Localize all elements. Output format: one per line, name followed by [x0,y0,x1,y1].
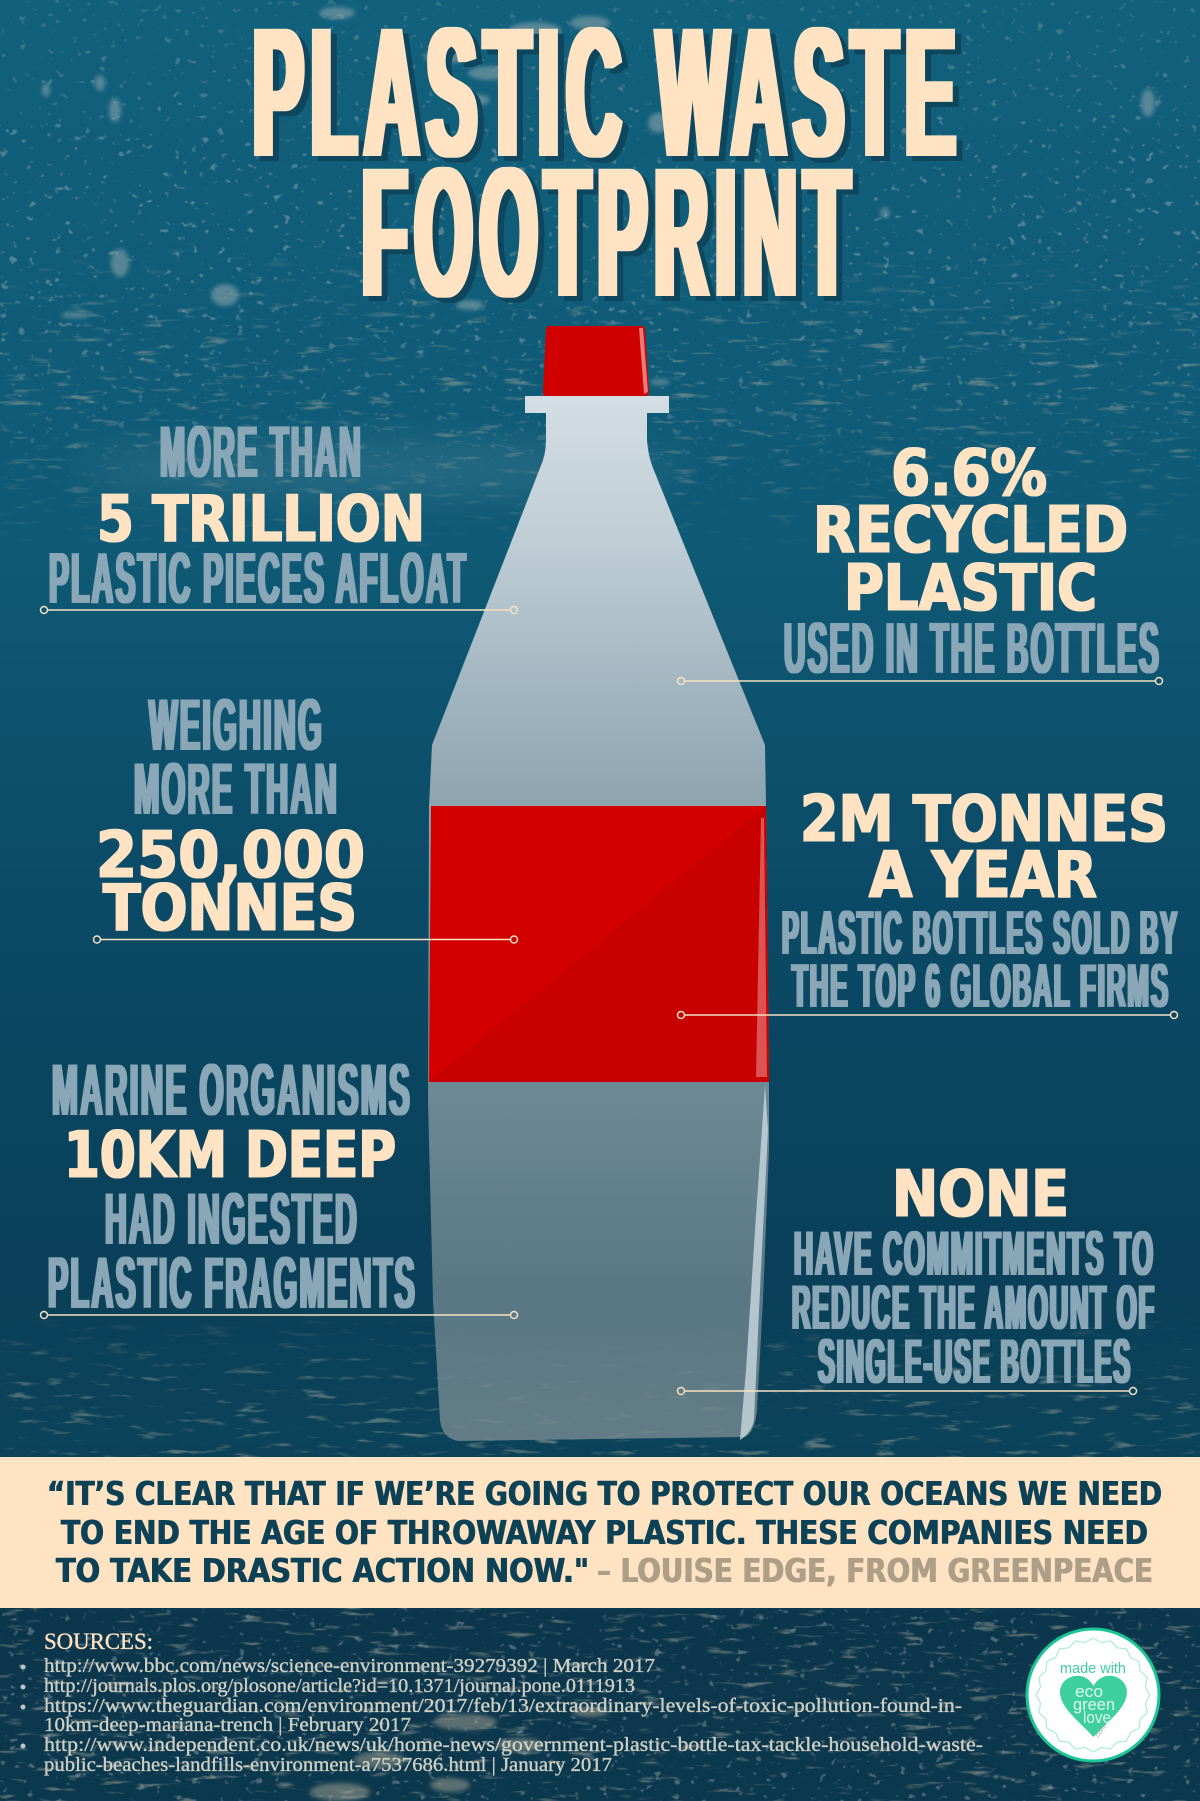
sources list: public-beaches-landfills-environment-a7537686.html | January 2017 [44,1754,612,1776]
callout: none have commitments [678,1158,1156,1397]
callout: marine organisms 10km deep: MARINE ORGANISMS [52,1050,412,1131]
bottle cap [543,326,649,396]
sources list: https://www.theguardian.com/environment/2017/feb/13/extraordinary-levels-of-toxic-pollution-found-in- [44,1695,962,1717]
callout: 6.6% recycled plastic: PLASTIC [844,552,1097,626]
bottle highlight [740,1085,768,1440]
callout: marine organisms 10km deep: HAD INGESTED [105,1179,359,1260]
bottle body [428,396,769,1441]
sources list: 10km-deep-mariana-trench | February 2017 [44,1714,411,1736]
callout: marine organisms 10km deep [40,1050,518,1324]
callout: weighing 250,000 tonnes: MORE THAN [134,749,339,830]
callout: marine organisms 10km deep: 10KM DEEP [64,1119,396,1193]
callout: 2M tonnes a year [678,783,1179,1021]
callout: 6.6% recycled plastic [678,437,1162,689]
quote band [0,1457,1200,1608]
bottle label [429,806,769,1082]
sources list: http://www.bbc.com/news/science-environment-39279392 | March 2017 [44,1655,655,1677]
badge: made with eco green love: eco [1075,1682,1103,1701]
quote text: TO TAKE DRASTIC ACTION NOW." [56,1551,589,1590]
title [253,0,963,336]
badge: made with eco green love [1027,1629,1159,1761]
sources list: http://journals.plos.org/plosone/article?id=10.1371/journal.pone.0111913 [44,1675,635,1697]
callout: marine organisms 10km deep: PLASTIC FRAGMENTS [48,1243,417,1324]
sources list: SOURCES: [44,1629,153,1654]
badge: made with eco green love: love [1083,1708,1111,1727]
sources list: http://www.independent.co.uk/news/uk/home-news/government-plastic-bottle-tax-tackle-household-waste- [44,1734,983,1756]
callout: weighing 250,000 tonnes [94,685,518,946]
sources list [20,1629,983,1776]
callout: weighing 250,000 tonnes: WEIGHING [149,685,324,766]
text: PLASTIC PIECES AFLOAT [49,539,468,619]
callout: weighing 250,000 tonnes: TONNES [103,872,357,946]
callout: none have commitments: NONE [892,1158,1069,1232]
callout: 5 trillion plastic pieces: MORE THAN [160,412,363,493]
callout: 6.6% recycled plastic: 6.6% [891,437,1047,511]
callout: 6.6% recycled plastic: RECYCLED [813,494,1128,568]
callout: 5 trillion plastic pieces [40,412,518,619]
badge: made with eco green love: made with [1060,1660,1126,1677]
badge: made with eco green love: .com [1093,1724,1108,1740]
callout: 2M tonnes a year: A YEAR [869,839,1097,913]
callout: 5 trillion plastic pieces: 5 TRILLION [97,483,425,557]
callout: weighing 250,000 tonnes: 250,000 [96,819,365,893]
quote text [47,1474,1162,1590]
bottle illustration [428,326,769,1441]
badge: made with eco green love: green [1073,1695,1115,1714]
